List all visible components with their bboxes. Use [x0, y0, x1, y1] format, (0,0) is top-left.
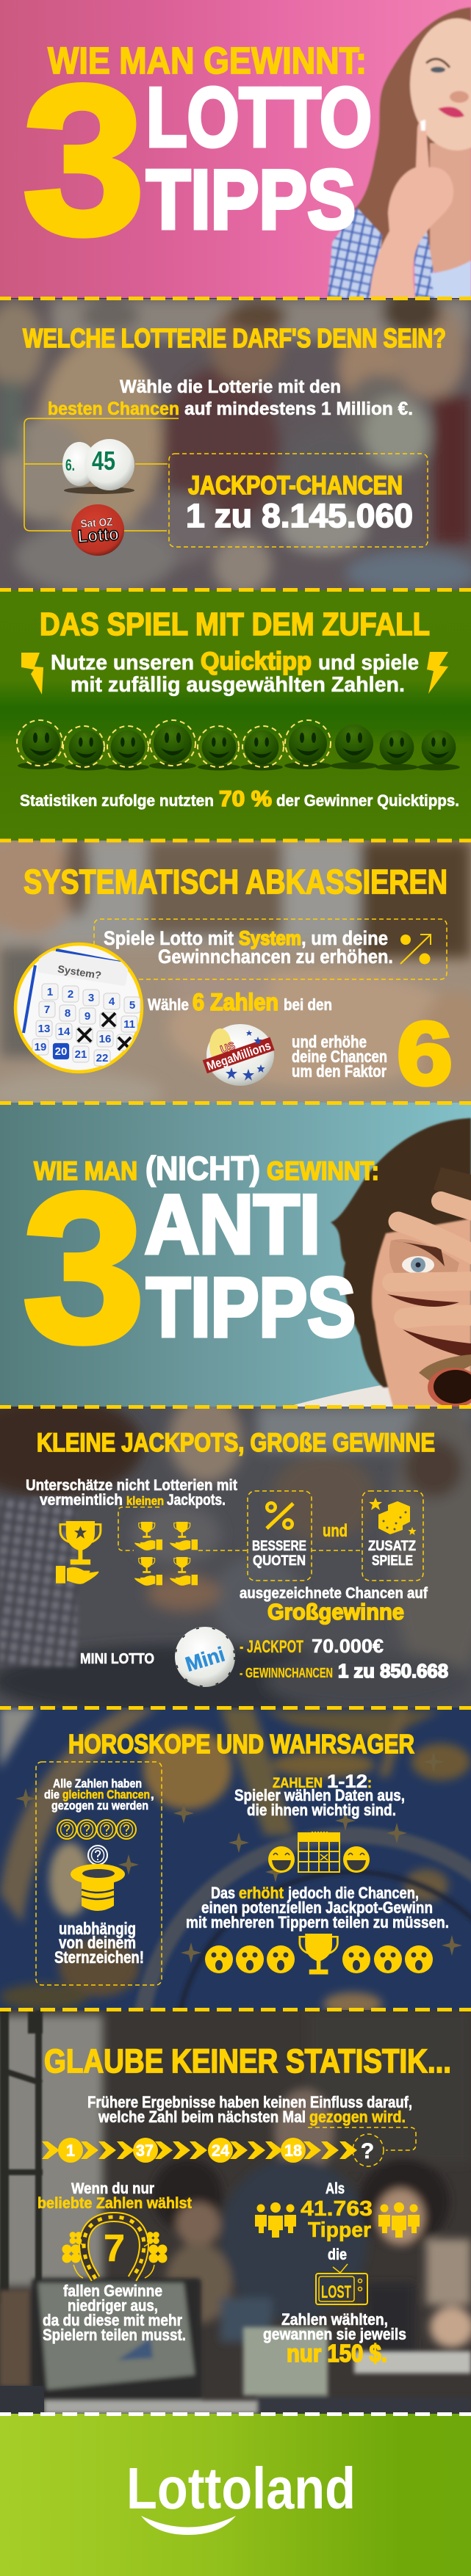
heading: tipps: TIPPS	[146, 1261, 356, 1354]
lottery ball: 6 aus 45	[62, 439, 134, 494]
panel: glaube keiner statistik	[0, 2010, 471, 2414]
lottery ticket circle: 16	[99, 1033, 111, 1045]
icon: television lost: LOST	[321, 2282, 351, 2302]
label: mini lotto: MINI LOTTO	[80, 1651, 154, 1667]
lottery ticket circle: 22	[96, 1052, 108, 1064]
box: better odds	[248, 1491, 312, 1581]
dashed connector	[308, 2127, 416, 2150]
text: numbers 1 to 12: :	[367, 1776, 372, 1791]
text: popular numbers	[37, 2180, 192, 2212]
text: numbers 1 to 12: ZAHLEN	[273, 1776, 323, 1791]
number sequence: 24	[212, 2141, 230, 2160]
icon: lightning right	[427, 652, 448, 694]
text: als 41.763 tipper: Als	[326, 2180, 345, 2197]
icon: magician hat	[71, 1864, 125, 1911]
panel: das spiel mit dem zufall	[0, 590, 471, 841]
box: better odds: BESSERE	[252, 1539, 306, 1554]
text: shared jackpot: erhöht	[239, 1884, 284, 1902]
icon: percent arrow	[400, 935, 431, 965]
box: equal chances	[36, 1762, 162, 1985]
lottery ticket circle: 11	[123, 1018, 135, 1031]
intro text: Jackpots.	[167, 1492, 226, 1509]
intro text: Frühere Ergebnisse haben keinen Einfluss darauf,	[87, 2093, 412, 2111]
mini lotto figures	[240, 1635, 448, 1682]
lottery ticket circle: 21	[75, 1048, 87, 1061]
icons: small trophies	[134, 1522, 198, 1586]
text: als 41.763 tipper: 41.763	[301, 2197, 373, 2221]
lottery ticket circle: 5	[129, 999, 135, 1012]
dashed connector	[118, 1507, 362, 1550]
intro text	[26, 1477, 237, 1509]
panel: welche lotterie	[0, 290, 471, 595]
text: pick six: 6 Zahlen	[193, 989, 278, 1015]
lottery ball: sat oz lotto	[71, 504, 124, 556]
text: shared jackpot: jedoch die Chancen,	[287, 1884, 419, 1902]
text: raise chances: und erhöhe	[292, 1032, 367, 1051]
smiley row	[17, 720, 460, 771]
lottery ticket circle: 2	[68, 988, 73, 1001]
mini lotto figures: 1 zu 850.668	[338, 1660, 448, 1682]
kicker: wie man gewinnt: WIE MAN GEWINNT:	[48, 40, 367, 81]
lottery ball: us mega millions: US	[219, 1040, 237, 1056]
number sequence: 1	[66, 2141, 75, 2160]
text: als 41.763 tipper: Tipper	[308, 2218, 371, 2242]
text: excellent chances: ausgezeichnete Chancen auf	[240, 1585, 428, 1602]
kicker: wie man nicht gewinnt: GEWINNT:	[267, 1157, 379, 1186]
panel: hero	[0, 0, 471, 299]
logo: lottoland: Lottoland	[126, 2456, 356, 2521]
lottery ticket circle: 14	[58, 1026, 71, 1038]
intro text: Wähle die Lotterie mit den	[120, 377, 341, 397]
lottery ball: sat oz lotto: Lotto	[77, 524, 120, 547]
icon: horseshoe and clovers	[62, 2217, 168, 2279]
kicker: wie man nicht gewinnt	[34, 1150, 379, 1187]
box: equal chances: gezogen zu werden	[51, 1799, 148, 1813]
lottery ball: us mega millions: MegaMillions	[205, 1039, 273, 1073]
text: excellent chances: Großgewinne	[267, 1599, 404, 1625]
number sequence: 37	[136, 2141, 154, 2160]
box: better odds: QUOTEN	[253, 1553, 306, 1569]
callout: system: , um deine	[301, 927, 388, 949]
text: won only 150 dollars: gewannen sie jeweils	[263, 2325, 406, 2343]
text: als 41.763 tipper: die	[328, 2246, 347, 2263]
text: pick six: Wähle	[148, 995, 189, 1014]
text: numbers 1 to 12: die ihnen wichtig sind.	[247, 1801, 396, 1819]
mini lotto figures: - GEWINNCHANCEN	[240, 1666, 333, 1680]
text: raise chances: deine Chancen	[292, 1047, 387, 1066]
icon: horseshoe and clovers: 7	[104, 2227, 125, 2270]
lottery ball: mini: Mini	[183, 1642, 227, 1676]
text: als 41.763 tipper	[301, 2180, 373, 2263]
quicktipp text: Quicktipp	[201, 647, 312, 675]
callout: system: System	[239, 927, 301, 949]
callout: jackpot chances	[169, 454, 428, 547]
icon: lightning left	[21, 653, 43, 694]
lottery ticket circle: 9	[85, 1010, 90, 1023]
big number three: 3	[22, 41, 145, 279]
statistic text	[20, 787, 459, 811]
lottery ball: 6 aus 45: 6.	[65, 456, 75, 474]
text: lower winnings: fallen Gewinne	[63, 2282, 162, 2300]
heading: tipps: TIPPS	[146, 153, 356, 247]
callout: system: Spiele Lotto mit	[104, 927, 234, 949]
text: won only 150 dollars	[263, 2310, 406, 2367]
box: extra games: SPIELE	[372, 1553, 413, 1569]
lottery ticket circle	[15, 944, 142, 1072]
text: pick six: bei den	[284, 995, 332, 1014]
panel: horoskope	[0, 1708, 471, 2010]
icons: coins	[57, 1820, 136, 1865]
text: und: und	[323, 1521, 348, 1541]
photo: hands together	[0, 830, 471, 1116]
lottery ticket circle: System?	[57, 962, 102, 982]
kicker: wie man nicht gewinnt: (NICHT)	[145, 1150, 260, 1187]
lottery ball: us mega millions	[199, 1024, 275, 1086]
photo: thinking woman	[328, 7, 471, 299]
text: pick six	[148, 989, 332, 1015]
lottery ticket circle: 3	[88, 992, 94, 1004]
panel: kleine jackpots	[0, 1395, 471, 1718]
connector bracket	[24, 418, 179, 531]
panel: footer	[0, 2414, 471, 2576]
text: popular numbers: Wenn du nur	[71, 2180, 154, 2197]
box: equal chances: gleichen Chancen	[62, 1788, 150, 1802]
callout: jackpot chances: JACKPOT-CHANCEN	[188, 471, 403, 500]
big number six: 6	[397, 1004, 453, 1103]
box: equal chances: von deinem	[59, 1933, 136, 1952]
text: numbers 1 to 12	[234, 1771, 405, 1819]
lottery ticket circle: 4	[109, 995, 115, 1008]
text: lower winnings: niedriger aus,	[68, 2296, 158, 2315]
lottery ticket circle: 8	[65, 1007, 71, 1020]
photo: friends group	[0, 290, 471, 595]
icon: calendar with happy faces	[268, 1832, 370, 1873]
statistic text: 70 %	[219, 787, 272, 811]
lottery ticket circle: 19	[35, 1041, 46, 1053]
text: won only 150 dollars: nur 150 $.	[287, 2340, 387, 2367]
intro text: welche Zahl beim nächsten Mal	[98, 2108, 306, 2126]
icon: big trophy in hand	[56, 1521, 101, 1584]
box: equal chances: die	[44, 1788, 60, 1802]
photo: shocked man	[288, 1118, 471, 1407]
icon: television lost	[316, 2264, 367, 2304]
text: won only 150 dollars: Zahlen wählten,	[281, 2310, 388, 2329]
icon: dice and stars	[369, 1498, 416, 1535]
callout: system	[94, 919, 447, 979]
intro text: besten Chancen	[48, 399, 179, 419]
heading: lotto: LOTTO	[146, 71, 372, 164]
text: shared jackpot: Das	[211, 1884, 235, 1902]
text: lower winnings	[43, 2282, 186, 2344]
icon: people left	[255, 2202, 296, 2238]
heading: anti: ANTI	[145, 1178, 320, 1271]
quicktipp text: Nutze unseren	[51, 651, 194, 675]
photo: astronomical clock	[0, 1708, 471, 2010]
lottery ticket circle: 7	[44, 1004, 50, 1016]
text: excellent chances	[240, 1585, 428, 1625]
text: lower winnings: da du diese mit mehr	[43, 2311, 182, 2329]
lottery ball: 6 aus 45: 45	[92, 446, 115, 476]
mini lotto figures: - JACKPOT	[240, 1637, 303, 1657]
number sequence: ?	[361, 2139, 374, 2163]
lottery ticket circle: 1	[47, 986, 53, 998]
number sequence	[42, 2134, 384, 2166]
panel: anti tipps hero	[0, 1103, 471, 1407]
statistic text: der Gewinner Quicktipps.	[276, 791, 459, 810]
intro text: kleinen	[126, 1494, 164, 1508]
quicktipp text: mit zufällig ausgewählten Zahlen.	[71, 673, 405, 697]
kicker: wie man nicht gewinnt: WIE MAN	[34, 1157, 137, 1186]
intro text: Unterschätze nicht Lotterien mit	[26, 1477, 237, 1494]
mini lotto figures: 70.000€	[312, 1635, 384, 1657]
intro text: vermeintlich	[40, 1492, 123, 1509]
statistic text: Statistiken zufolge nutzten	[20, 791, 214, 810]
text: shared jackpot	[186, 1884, 449, 1931]
lottery ball: mini	[175, 1627, 235, 1687]
intro text	[48, 377, 413, 419]
number sequence: 18	[284, 2141, 302, 2160]
text: raise chances: um den Faktor	[292, 1062, 386, 1081]
box: equal chances: Alle Zahlen haben	[53, 1777, 142, 1790]
lottery ball: sat oz lotto: Sat OZ	[80, 516, 113, 531]
lottery ticket circle: 20	[55, 1045, 67, 1058]
photo: office team	[0, 2010, 471, 2414]
text: shared jackpot: einen potenziellen Jackpot-Gewinn	[201, 1898, 433, 1917]
text: numbers 1 to 12: Spieler wählen Daten aus,	[234, 1786, 405, 1804]
intro text	[87, 2093, 412, 2126]
text: raise chances	[292, 1032, 387, 1081]
box: extra games	[362, 1491, 423, 1581]
box: equal chances: ,	[151, 1788, 154, 1802]
text: lower winnings: Spielern teilen musst.	[43, 2326, 186, 2344]
box: extra games: ZUSATZ	[368, 1539, 416, 1554]
lottery ticket circle: 13	[38, 1023, 50, 1035]
icon: people right	[378, 2202, 420, 2238]
quicktipp text	[51, 647, 419, 697]
panel: systematisch abkassieren	[0, 830, 471, 1116]
icons: trophy with shocked faces	[205, 1934, 433, 1974]
icon: percent	[265, 1501, 294, 1530]
big number three: 3	[22, 1149, 145, 1387]
photo: woman with phone	[0, 1395, 471, 1718]
callout: system: Gewinnchancen zu erhöhen.	[158, 946, 393, 968]
box: equal chances: unabhängig	[59, 1919, 136, 1938]
intro text: auf mindestens 1 Million €.	[184, 399, 413, 419]
text: numbers 1 to 12: 1-12	[327, 1771, 367, 1792]
callout: jackpot chances: 1 zu 8.145.060	[186, 497, 413, 534]
intro text: gezogen wird.	[309, 2108, 406, 2126]
box: equal chances: Sternzeichen!	[54, 1948, 144, 1967]
text: popular numbers: beliebte Zahlen wählst	[37, 2195, 192, 2212]
quicktipp text: und spiele	[318, 651, 419, 675]
